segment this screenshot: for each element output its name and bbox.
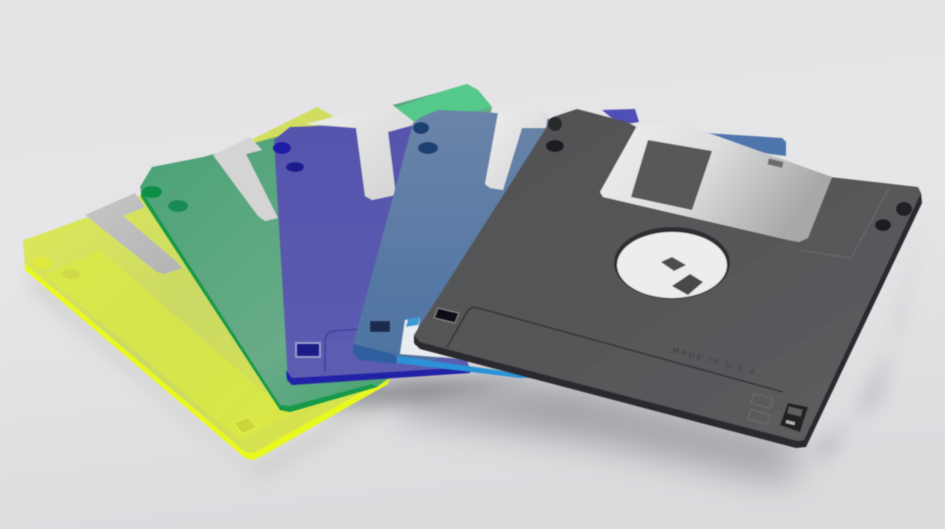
write-protect window <box>434 308 459 323</box>
metal hub <box>617 232 727 298</box>
blue disk screw holes <box>413 122 438 154</box>
yellow disk shutter <box>85 193 182 274</box>
green disk shutter <box>213 137 278 221</box>
purple disk screw holes <box>273 142 304 172</box>
purple disk body <box>274 122 470 385</box>
cast shadows <box>30 200 925 480</box>
light-blue label sliver <box>397 356 545 378</box>
purple disk shutter <box>305 103 417 200</box>
shutter window <box>631 140 712 210</box>
screw holes <box>546 117 912 231</box>
far purple corner <box>602 109 639 125</box>
shutter <box>600 124 832 242</box>
blue disk body <box>353 110 560 362</box>
disk: blue, with corner showing behind the black disk <box>353 109 786 378</box>
green disk screw holes <box>142 186 188 212</box>
disk: purple <box>273 103 470 385</box>
disk: dark grey front <box>414 109 922 448</box>
purple disk write-protect window <box>296 343 320 357</box>
yellow disk glowing edge <box>25 264 388 460</box>
green disk edge <box>141 190 377 412</box>
hub spindle hole <box>661 257 686 271</box>
embossed text: MADE IN U.S.A. <box>671 345 763 379</box>
blue disk shutter <box>485 112 548 190</box>
blue disk write-protect window <box>370 321 390 332</box>
black disk side edge <box>414 193 922 448</box>
bottom-right tab <box>780 403 808 432</box>
blue disk far corner <box>690 132 786 156</box>
shutter notch <box>767 158 783 168</box>
yellow disk body <box>23 107 400 460</box>
yellow disk lower bright band <box>45 250 290 440</box>
right recess outline <box>800 188 889 258</box>
label recess outline <box>447 308 783 392</box>
green disk top corner <box>395 84 492 125</box>
blue disk edge <box>353 344 396 364</box>
disk: translucent yellow <box>23 107 400 460</box>
hub opening <box>614 227 730 299</box>
yellow disk screw holes <box>32 257 80 279</box>
label blue tip <box>406 317 420 327</box>
label white strip <box>400 318 500 362</box>
purple disk edge <box>286 367 470 385</box>
yellow disk write-protect window <box>233 417 257 434</box>
black disk body <box>414 109 921 441</box>
green disk body <box>140 84 492 412</box>
hub drive slot <box>672 274 703 295</box>
recessed squares <box>748 394 773 424</box>
tab highlights <box>786 406 803 425</box>
purple disk label recess <box>325 329 360 372</box>
disk: green <box>140 84 492 412</box>
